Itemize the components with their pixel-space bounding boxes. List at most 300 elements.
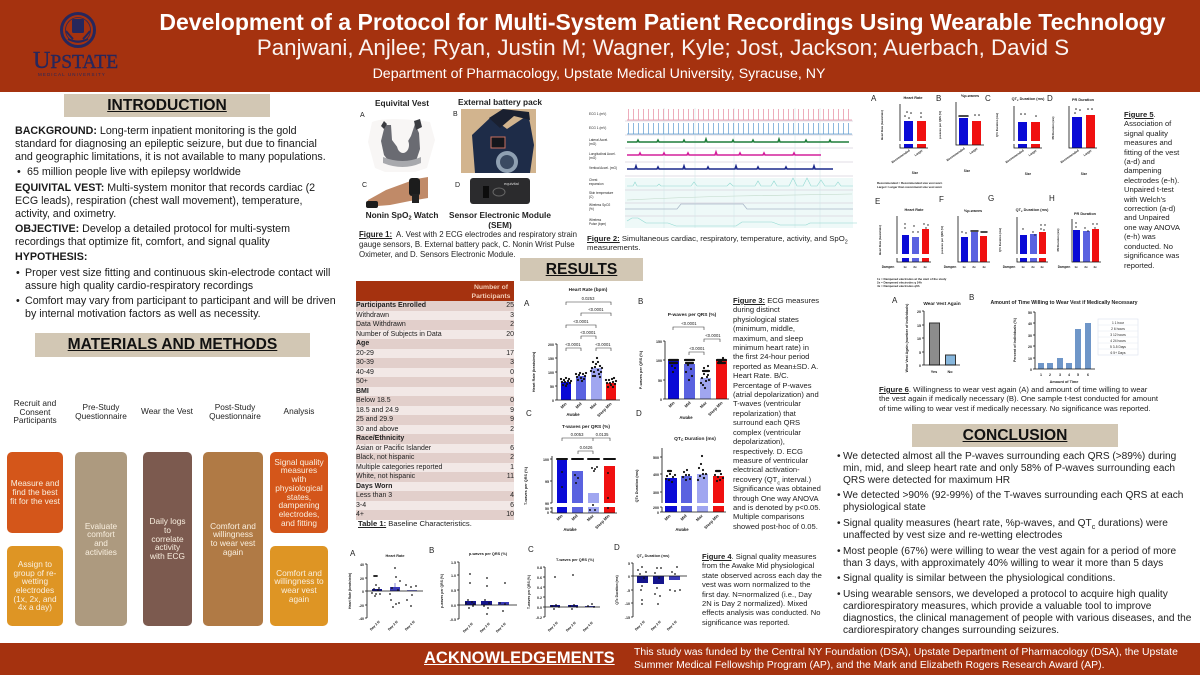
chart: p-waves per QRS: 100 <box>656 359 662 363</box>
table: baseline characteristics: 30-39 <box>356 359 374 366</box>
chart: normalized p-waves: p-waves per QRS (%) <box>469 552 508 556</box>
step heading: post-study: Questionnaire <box>209 411 261 421</box>
chart: normalized QTc <box>614 543 687 632</box>
table: baseline characteristics: Less than 3 <box>356 492 392 499</box>
chart: QTc duration: Mid <box>679 513 688 522</box>
table: baseline characteristics: 11 <box>507 473 514 480</box>
chart: QTc duration: Duration (ms) <box>683 436 716 442</box>
chart: p-waves per QRS: <0.0001 <box>689 346 705 351</box>
chart: amount of time willing: 4 <box>1068 373 1070 377</box>
text: conclusion bullets: Most people (67%) were willing to wear the vest again for a period of more <box>843 546 1176 557</box>
chart: normalized t-waves <box>527 545 600 633</box>
chart: wear vest again: No <box>947 370 953 374</box>
chart: normalized t-waves: Day 3 N <box>565 620 577 633</box>
chart: dampen p-waves: 4x <box>982 265 986 269</box>
header band <box>0 0 1200 92</box>
caption: figure 3: (minimum, middle, <box>733 324 795 333</box>
chart: dampen heart rate: Heart Rate <box>904 208 924 212</box>
chart: heart rate by state: Sleep Min <box>596 401 613 418</box>
caption: figure 3: minimum heart rate) in <box>733 343 809 352</box>
chart: amount of time willing: 40 <box>1028 322 1032 326</box>
box: measure <box>7 452 63 533</box>
caption: figure 3 <box>733 296 821 531</box>
chart: normalized p-waves: p-waves per QRS (%) <box>440 574 444 608</box>
caption: figure 4: 2N is Day 2 normalized). Mixed <box>702 599 808 608</box>
chart: normalized p-waves: Day 3 N <box>479 621 491 634</box>
chart: fit p-waves: %p-waves <box>961 94 979 98</box>
caption: figure 5: significance was <box>1124 251 1179 260</box>
chart: QTc duration: QT <box>674 437 681 442</box>
chart: fit QTc: C <box>985 94 991 103</box>
caption: figure 3: during distinct <box>733 305 780 314</box>
caption: figure 3: depolarization), <box>733 437 785 446</box>
heading: introduction <box>64 94 270 117</box>
chart: wear vest again: A <box>892 296 898 305</box>
heading: materials and methods <box>35 333 310 357</box>
text: conclusion bullets: • <box>837 451 841 462</box>
chart: normalized p-waves: 1.5 <box>451 561 456 565</box>
chart: wear vest again: 15 <box>917 324 921 328</box>
note: dampen legend: 4x = Dampened electrodes q6h <box>877 284 920 288</box>
text: conclusion bullets: • <box>837 546 841 557</box>
caption: figure 4: vest was worn normalized to the <box>702 580 810 589</box>
caption: figure 3: and is denoted by p<0.05. <box>733 503 821 512</box>
chart: dampen PR: PR Duration (ms) <box>1056 229 1060 251</box>
chart: wear vest again: 0 <box>919 364 921 368</box>
box: assign: wetting <box>22 576 48 586</box>
box: evaluate: comfort <box>87 529 115 539</box>
table: baseline characteristics: 3 <box>510 312 514 319</box>
chart: heart rate by state: Heart Rate (beats/min) <box>532 351 536 392</box>
chart: normalized heart rate: 0 <box>362 590 364 594</box>
chart: fit PR: PR Duration <box>1072 98 1095 102</box>
photo: battery pack <box>461 109 536 173</box>
step heading: recruit: Participants <box>13 415 57 425</box>
table: baseline characteristics: Data Withdrawn <box>356 321 406 328</box>
legend: time categories: 2 6 hours <box>1111 327 1125 331</box>
caption: figure 3: electrical activation- <box>733 465 800 474</box>
box: assign: group of re- <box>14 568 56 578</box>
chart: dampen heart rate: 1x <box>903 265 907 269</box>
chart: normalized p-waves: 1.0 <box>451 574 456 578</box>
department: Department of Pharmacology, Upstate Medical University, Syracuse, NY <box>373 66 825 82</box>
chart: t-waves per QRS: 95 <box>545 480 549 484</box>
chart: amount of time willing: 10 <box>1028 357 1032 361</box>
chart: normalized t-waves: 0.8 <box>537 566 542 570</box>
box: evaluate <box>75 452 127 626</box>
panel letters: A <box>360 112 365 119</box>
chart: normalized QTc: QT <box>637 554 642 558</box>
table: baseline characteristics: Below 18.5 <box>356 397 391 404</box>
box: daily logs: to <box>164 525 171 535</box>
chart: t-waves per QRS: 0.0426 <box>580 445 593 450</box>
caption: figure 5: Unpaired t-test <box>1124 185 1174 194</box>
chart: figure 2 physiological traces: Wireless SpO2 <box>589 203 610 207</box>
table: baseline characteristics: Participants <box>472 292 510 300</box>
chart: normalized QTc: D <box>614 543 620 552</box>
chart: heart rate by state: 150 <box>548 357 554 361</box>
text: introduction body: • <box>16 267 20 279</box>
box: signal quality <box>270 452 328 533</box>
chart: heart rate by state: 100 <box>548 371 554 375</box>
box: assign: Assign to <box>18 559 52 569</box>
photo: wrist oximeter <box>366 177 428 208</box>
chart: fit QTc: QT <box>1012 97 1017 101</box>
box: evaluate: Evaluate <box>85 521 117 531</box>
chart: normalized p-waves: Day 4 N <box>495 621 507 634</box>
chart: fit heart rate: Heart Rate <box>904 96 922 100</box>
panel: figure 6 charts <box>892 293 1138 384</box>
step heading: post-study <box>209 402 261 421</box>
text: conclusion bullets: than 3 days, with approximately 40% willing to wear it more than 5 days <box>843 558 1163 569</box>
chart: dampen heart rate: Dampen <box>882 265 894 269</box>
chart: fit p-waves: B <box>936 94 941 103</box>
chart: fit QTc: Recommended <box>1005 148 1025 164</box>
text: introduction body: Comfort may vary from participant to participant and will be driven <box>25 295 336 307</box>
caption: figure 4 <box>702 552 822 627</box>
note: size legend: Recommended = Recommended size vest worn <box>877 181 942 185</box>
legend: time categories: 1 1 hour <box>1112 321 1125 325</box>
box: willingness <box>270 546 328 626</box>
table: baseline characteristics: 4 <box>510 492 514 499</box>
legend: time categories: 6 5+ Days <box>1111 351 1126 355</box>
acknowledgements text <box>634 647 1178 671</box>
panel: figure 3 charts <box>524 287 729 532</box>
step heading: analysis: Analysis <box>284 406 314 416</box>
caption: figure 1: gauge sensors, B. External battery pack, C. Nonin Wrist Pulse <box>359 240 575 249</box>
label: watch: 2 <box>408 216 412 222</box>
chart: heart rate by state <box>524 287 620 418</box>
text: introduction body: HYPOTHESIS: <box>15 251 87 263</box>
chart: dampen heart rate: E <box>875 197 880 206</box>
table: baseline characteristics: White, not hispanic <box>356 473 415 480</box>
panel letters: D <box>455 182 460 189</box>
table: baseline characteristics: Black, not hispanic <box>356 454 414 461</box>
caption: figure 6 <box>879 385 1158 413</box>
box: daily logs: correlate <box>151 534 184 544</box>
caption: figure 5: dampening <box>1124 166 1162 175</box>
box: assign: (1x, 2x, and <box>13 594 57 604</box>
photo: sensor electronic module: equivital <box>504 181 519 186</box>
chart: normalized QTc: 0 <box>628 575 630 579</box>
chart: dampen PR: 2x <box>1084 265 1088 269</box>
chart: fit p-waves: Size <box>964 169 970 173</box>
chart: t-waves per QRS: C <box>526 409 532 418</box>
box: assign <box>7 546 63 626</box>
legend: time categories <box>1098 319 1138 355</box>
chart: normalized p-waves: Day 2 N <box>462 621 474 634</box>
chart: dampen QTc: QT <box>1016 208 1021 212</box>
box: signal quality: Signal quality <box>274 457 324 467</box>
chart: t-waves per QRS: Min <box>555 513 564 522</box>
table: baseline characteristics: 3-4 <box>356 502 366 509</box>
chart: fit PR: Recommended <box>1060 148 1080 164</box>
chart: figure 2 physiological traces: Chest <box>589 178 597 182</box>
step heading: pre-study: Pre-Study <box>83 402 119 412</box>
chart: normalized heart rate: Day 3 N <box>387 619 399 632</box>
table: baseline characteristics: 40-49 <box>356 369 374 376</box>
box: willingness: wear vest <box>281 585 317 595</box>
panel letters: B <box>453 111 458 118</box>
chart: figure 2 physiological traces: Skin temperature <box>589 191 613 195</box>
panel: figure 1 device photos <box>360 97 551 229</box>
step heading: post-study: Post-Study <box>215 402 255 412</box>
chart: t-waves per QRS: 0 <box>547 511 549 515</box>
chart: t-waves per QRS: 90 <box>545 502 549 506</box>
chart: fit heart rate: Recommended <box>891 148 911 164</box>
chart: amount of time willing <box>969 293 1138 384</box>
acknowledgements text: Summer Medical Fellowship Program (AP), and the Mark and Elizabeth Rogers Research Award (AP). <box>634 660 1104 671</box>
chart: p-waves per QRS: B <box>638 297 643 306</box>
box: daily logs <box>143 452 192 626</box>
box: comfort <box>203 452 263 626</box>
chart: p-waves per QRS: 0 <box>660 398 662 402</box>
chart: fit p-waves: Recommended <box>946 146 966 162</box>
chart: dampen QTc: 4x <box>1040 265 1044 269</box>
text: conclusion bullets: • <box>837 518 841 529</box>
chart: p-waves per QRS: Max <box>699 400 708 409</box>
caption: table 1: Table 1: Baseline Characteristics. <box>358 519 472 528</box>
step heading: pre-study: Questionnaire <box>75 411 127 421</box>
chart: t-waves per QRS: T-waves per QRS (%) <box>524 466 528 505</box>
text: introduction body: OBJECTIVE: Develop a detailed protocol for multi-system <box>15 223 290 235</box>
chart: p-waves per QRS <box>638 297 729 420</box>
caption: figure 5: measures and <box>1124 138 1172 147</box>
chart: heart rate by state: Awake <box>566 412 580 417</box>
chart: dampen QTc: Dampen <box>1003 265 1015 269</box>
caption: figure 5: conducted. No <box>1124 242 1173 251</box>
chart: t-waves per QRS: 100 <box>543 458 549 462</box>
table: baseline characteristics: 17 <box>506 350 514 357</box>
panel: figure 4 charts <box>348 543 687 634</box>
chart: normalized t-waves: T-waves per QRS (%) <box>556 558 595 562</box>
chart: p-waves per QRS: 150 <box>656 340 662 344</box>
chart: figure 2 physiological traces: Vertical Accel. (mG) <box>589 166 617 170</box>
acknowledgements heading: ACKNOWLEDGEMENTS <box>424 649 615 667</box>
caption: figure 2 <box>587 234 848 252</box>
text: conclusion bullets: • <box>837 490 841 501</box>
chart: fit heart rate: Size <box>912 171 918 175</box>
box: daily logs: activity <box>155 542 180 552</box>
caption: figure 3: (atrial depolarization) and <box>733 390 819 399</box>
text: introduction body: by internal motivation factors as well as necessity. <box>25 308 261 320</box>
chart: normalized QTc: QTc Duration (ms) <box>615 575 619 605</box>
caption: figure 4: from the Awake Mid physiological <box>702 561 814 570</box>
box: signal quality: and fitting <box>281 518 317 528</box>
chart: wear vest again: 20 <box>917 310 921 314</box>
table: baseline characteristics: Number of Subjects in Data <box>356 331 442 338</box>
chart: normalized t-waves: 0.6 <box>537 576 542 580</box>
table: baseline characteristics: 25 <box>506 302 514 309</box>
table: baseline characteristics: 3 <box>510 359 514 366</box>
box: comfort: Comfort and <box>210 521 256 531</box>
text: conclusion bullets: unaffected by vest size and re-wetting electrodes <box>843 530 1062 541</box>
chart: normalized heart rate: -20 <box>359 604 364 608</box>
table: baseline characteristics: 2 <box>510 454 514 461</box>
chart: dampen QTc: 1x <box>1021 265 1025 269</box>
caption: figure 5: reported. <box>1124 260 1154 270</box>
caption: figure 1 <box>359 230 577 259</box>
caption: figure 4: effects analysis was conducted. No <box>702 608 820 617</box>
chart: t-waves per QRS: Max <box>586 513 595 522</box>
chart: fit QTc <box>985 94 1045 176</box>
box: signal quality: states, <box>287 492 311 502</box>
text: conclusion bullets: QRS were detected for maximum HR <box>843 475 1010 486</box>
text: introduction body: and geographic limitations, it is not available to many populations. <box>15 151 326 163</box>
caption: figure 3: respectively. D. ECG <box>733 446 803 456</box>
chart: amount of time willing: 30 <box>1028 334 1032 338</box>
chart: heart rate by state: Mid <box>574 401 583 410</box>
table: baseline characteristics: Participants Enrolled <box>356 302 426 309</box>
table: baseline characteristics: Race/Ethnicity <box>356 435 404 442</box>
chart: normalized heart rate: A <box>350 549 356 558</box>
table: baseline characteristics: 20-29 <box>356 350 374 357</box>
chart: dampen PR: 4x <box>1093 265 1097 269</box>
heading: conclusion: CONCLUSION <box>963 427 1067 444</box>
caption: figure 5: fitting of the vest <box>1124 148 1179 157</box>
icon: Upstate logo: UPSTATE <box>33 48 118 74</box>
label: battery heading: External battery pack <box>458 97 542 107</box>
text: conclusion bullets: We detected >90% (92-99%) of the T-waves surrounding each QRS at each <box>843 490 1183 501</box>
chart: QTc duration: Awake <box>675 527 689 532</box>
box: assign: electrodes <box>16 585 54 595</box>
caption: figure 5: electrodes (e-h). <box>1124 176 1179 185</box>
chart: p-waves per QRS: <0.0001 <box>681 321 697 326</box>
table: baseline characteristics: 6 <box>510 445 514 452</box>
text: introduction body: ECG leads), respiration (chest wall movement), temperature, <box>15 195 302 207</box>
chart: normalized QTc: c <box>642 555 644 559</box>
box: willingness: Comfort and <box>276 568 322 578</box>
chart: fit p-waves <box>936 94 984 173</box>
text: introduction body: Proper vest size fitting and continuous skin-electrode contact will <box>25 267 330 279</box>
chart: p-waves per QRS: P-waves per QRS (%) <box>668 312 717 318</box>
chart: amount of time willing: 3 <box>1059 373 1061 377</box>
note: size legend: Larger= Larger than recommend size vest worn <box>877 185 942 189</box>
chart: heart rate by state: <0.0001 <box>580 330 596 335</box>
caption: figure 3: recovery (QTc interval.) <box>733 475 811 486</box>
chart: p-waves per QRS: Min <box>667 400 676 409</box>
step heading: recruit <box>13 398 57 425</box>
caption: figure 5 <box>1124 110 1180 270</box>
chart: normalized t-waves: Day 4 N <box>582 620 594 633</box>
chart: amount of time willing: 5 <box>1077 373 1079 377</box>
caption: figure 3: measure of ventricular <box>733 456 808 465</box>
chart: p-waves per QRS: Mid <box>683 400 692 409</box>
chart: figure 2 physiological traces: Pulse (bpm) <box>589 222 606 226</box>
chart: QTc duration: 400 <box>653 473 659 477</box>
chart: fit QTc: Duration (ms) <box>1019 97 1045 101</box>
chart: figure 2 physiological traces: (C) <box>589 195 593 199</box>
chart: dampen p-waves: 1x <box>962 265 966 269</box>
chart: normalized heart rate: Heart Rate (beats/min) <box>348 573 352 609</box>
legend: time categories: 5 3-5 Days <box>1110 345 1126 349</box>
chart: normalized t-waves: 0.4 <box>537 586 542 590</box>
chart: QTc duration: 200 <box>653 506 659 510</box>
chart: normalized t-waves: 0.0 <box>537 606 542 610</box>
chart: fit PR: PR Duration (ms) <box>1051 117 1055 139</box>
box: signal quality: measures <box>281 465 317 475</box>
text: conclusion bullets: • <box>837 573 841 584</box>
chart: dampen heart rate: 2x <box>913 265 917 269</box>
chart: QTc duration: 500 <box>653 456 659 460</box>
step heading: recruit: Recruit and <box>14 398 56 408</box>
chart: amount of time willing: 1 <box>1040 373 1042 377</box>
chart: normalized QTc: Day 4 N <box>666 619 678 632</box>
chart: normalized t-waves: 0.2 <box>537 596 542 600</box>
box: signal quality: with <box>292 474 306 484</box>
text: conclusion bullets: Using wearable sensors, we developed a protocol to acquire high quality <box>843 589 1168 600</box>
chart: fit p-waves: p-waves per QRS (%) <box>938 111 942 139</box>
chart: normalized heart rate: 40 <box>360 563 364 567</box>
box: signal quality: physiological <box>275 483 323 493</box>
chart: normalized heart rate <box>348 549 423 632</box>
chart: QTc duration: Sleep Min <box>703 513 720 530</box>
text: introduction body: BACKGROUND: Long-term inpatient monitoring is the gold <box>15 125 297 137</box>
chart: dampen PR <box>1049 194 1101 269</box>
chart: figure 2 physiological traces: ECG 1 (mV) <box>589 126 606 130</box>
chart: normalized QTc: 5 <box>628 562 630 566</box>
text: conclusion bullets: physiological state <box>843 502 926 513</box>
chart: t-waves per QRS: 50 <box>545 507 549 511</box>
acknowledgements text: This study was funded by the Central NY Foundation (DSA), Upstate Department of Pharmacology (DSA), the Upstate <box>634 647 1178 658</box>
chart: amount of time willing: B <box>969 293 974 302</box>
chart: dampen PR: PR Duration <box>1074 212 1097 216</box>
panel: methods flow <box>7 398 328 626</box>
chart: t-waves per QRS: Awake <box>563 527 577 532</box>
caption: figure 5: (e-h) was <box>1124 232 1156 241</box>
chart: fit heart rate <box>871 94 928 175</box>
chart: normalized heart rate: Day 4 N <box>404 619 416 632</box>
caption: figure 6: Figure 6. Willingness to wear vest again (A) and amount of time willing to wear <box>879 385 1147 394</box>
panel letters: C <box>362 182 367 189</box>
chart: dampen QTc: 2x <box>1031 265 1035 269</box>
box: daily logs: with ECG <box>150 551 185 561</box>
caption: figure 5: Association of <box>1124 119 1171 128</box>
chart: normalized p-waves: -0.5 <box>450 618 456 622</box>
chart: normalized p-waves <box>429 546 517 634</box>
caption: figure 4: first day. N=normalized (i.e., Day <box>702 590 812 599</box>
caption: figure 4: state observed across each day the <box>702 571 822 580</box>
chart: normalized p-waves: 0.0 <box>451 604 456 608</box>
chart: fit PR: D <box>1047 94 1053 103</box>
box: measure: Measure and <box>11 478 59 488</box>
legend: time categories: 4 24 hours <box>1110 339 1126 343</box>
chart: normalized QTc: Day 3 N <box>650 619 662 632</box>
box: evaluate: activities <box>85 547 117 557</box>
table: baseline characteristics: BMI <box>356 388 369 395</box>
chart: fit PR <box>1047 94 1097 176</box>
label: SEM: Sensor Electronic Module <box>449 210 551 220</box>
chart: amount of time willing: 2 <box>1049 373 1051 377</box>
caption: figure 3: complex (ventricular <box>733 428 801 437</box>
chart: normalized QTc: -15 <box>625 616 630 620</box>
chart: p-waves per QRS: P-waves per QRS (%) <box>639 350 643 389</box>
chart: figure 2 physiological traces: expansion <box>589 182 604 186</box>
caption: figure 5: Figure 5. <box>1124 110 1156 119</box>
chart: fit QTc: Larger <box>1028 148 1038 157</box>
chart: fit QTc: c <box>1017 98 1019 102</box>
chart: normalized t-waves: -0.2 <box>536 616 542 620</box>
chart: amount of time willing: Amount of Time Willing to Wear Vest if Medically Necessary <box>990 300 1138 306</box>
chart: heart rate by state: <0.0001 <box>588 307 604 312</box>
table: baseline characteristics <box>356 281 514 520</box>
text: conclusion bullets: diagnostics, the clinical management of people with various diseases, and the <box>843 613 1191 624</box>
chart: dampen QTc: Duration (ms) <box>1023 208 1049 212</box>
box: assign: 4x a day) <box>18 602 52 612</box>
text: conclusion bullets: We detected almost all the P-waves surrounding each QRS (>89%) during <box>843 451 1176 462</box>
caption: figure 3: reported as Mean±SD. A. <box>733 362 818 371</box>
chart: fit heart rate: Heart Rate (beats/min) <box>880 110 884 140</box>
